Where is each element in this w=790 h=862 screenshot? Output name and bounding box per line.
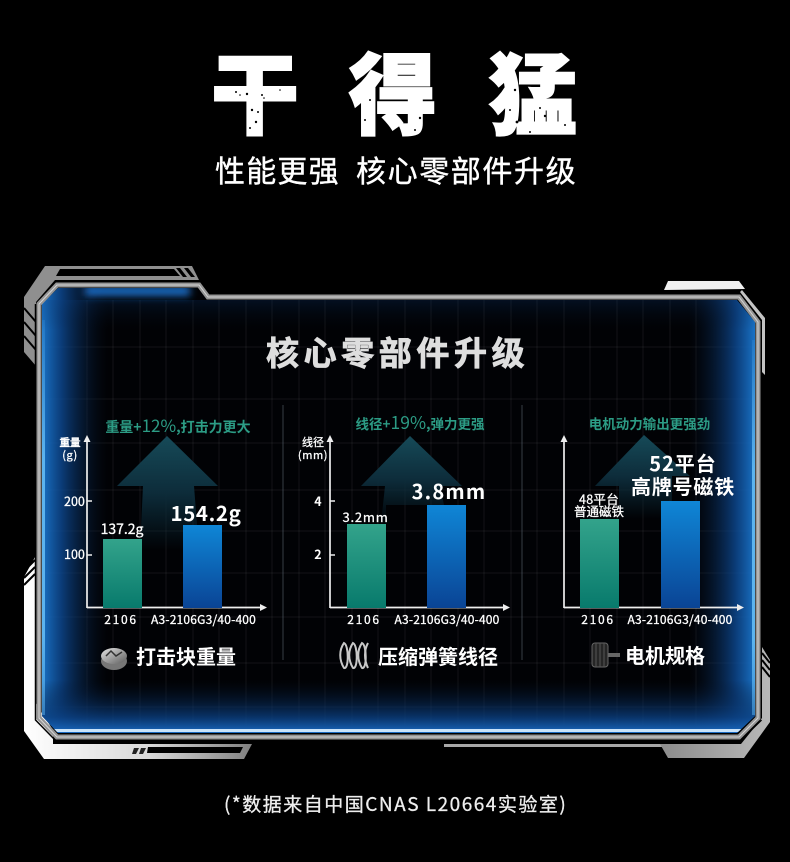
- bar: 2106: [574, 489, 624, 628]
- axis labels: 100: [64, 544, 85, 563]
- axis labels: 2: [314, 544, 322, 563]
- axes: [560, 435, 744, 611]
- bottom-left silver piece: [24, 557, 252, 759]
- blue glows: [42, 286, 755, 733]
- title: 干得猛: 得: [349, 26, 437, 153]
- footnote: (*数据来自中国CNAS L20664实验室): [224, 790, 567, 817]
- axis labels: 重量: [60, 435, 81, 450]
- axis labels: (g): [62, 447, 78, 463]
- bar: 2106: 普通磁铁: [574, 501, 624, 520]
- bar: 2106: 2106: [104, 611, 138, 628]
- bar: 2106: 2106: [581, 611, 615, 628]
- bar: A3-2106G3: A3-2106G3/40-400: [394, 611, 500, 628]
- chart: wire diameter: [298, 410, 510, 670]
- bar: A3-2106G3: [627, 448, 735, 628]
- axis labels: [298, 434, 328, 563]
- title: 干得猛: 猛: [489, 26, 577, 153]
- axis labels: [60, 435, 85, 563]
- bar: A3-2106G3: [151, 497, 256, 628]
- chart: weight: [60, 412, 267, 670]
- background arrow: [117, 436, 218, 550]
- axes: [326, 435, 510, 611]
- panel heading: 核心零部件升级: [266, 327, 529, 375]
- caption: 线径+19%,弹力更强: [356, 410, 485, 435]
- bar: 2106: [342, 507, 389, 628]
- bar: 2106: 3.2mm: [342, 507, 389, 526]
- icon: hammer block: [101, 648, 127, 670]
- bar: A3-2106G3: A3-2106G3/40-400: [627, 611, 733, 628]
- chrome frame band: [36, 285, 762, 741]
- panel frame and glow: [24, 266, 770, 759]
- background arrow: [361, 436, 462, 524]
- bar: 2106: 2106: [347, 611, 381, 628]
- caption: 电机动力输出更强劲: [589, 413, 710, 433]
- background grid: [78, 300, 719, 708]
- bar: A3-2106G3: A3-2106G3/40-400: [151, 611, 256, 628]
- title: 干得猛: 干: [211, 26, 299, 153]
- chart: motor: [560, 413, 744, 669]
- background arrow: [595, 435, 690, 519]
- bar: A3-2106G3: [394, 476, 500, 628]
- subtitle: 性能更强: [215, 147, 340, 191]
- top-right silver tab: [664, 281, 765, 375]
- bottom-right silver piece: [444, 647, 770, 758]
- icon: motor: [592, 643, 620, 667]
- axes: [84, 435, 267, 611]
- bottom-left notch: [24, 560, 243, 754]
- label: 电机规格: [625, 640, 705, 669]
- bar: A3-2106G3: 154.2g: [171, 497, 241, 527]
- icon: spring: [340, 643, 368, 668]
- axis labels: 线径: [302, 434, 324, 450]
- bar: 2106: 137.2g: [101, 519, 144, 539]
- bar: A3-2106G3: 高牌号磁铁: [631, 471, 735, 500]
- bar: A3-2106G3: 3.8mm: [412, 476, 486, 505]
- axis labels: 200: [64, 491, 85, 510]
- subtitle part two: 核心零部件升级: [356, 147, 577, 191]
- top-left silver tab: [24, 266, 199, 366]
- axis labels: (mm): [298, 447, 328, 463]
- bar: 2106: 48平台: [579, 489, 619, 508]
- panel background: [42, 288, 755, 733]
- title: 干得猛: [211, 26, 577, 153]
- label: 压缩弹簧线径: [378, 641, 498, 670]
- column dividers: [283, 405, 522, 660]
- caption: 重量+12%,打击力更大: [105, 412, 251, 437]
- label: 打击块重量: [136, 641, 236, 670]
- bar: A3-2106G3: 52平台: [649, 448, 717, 477]
- bar: 2106: [101, 519, 144, 628]
- axis labels: 4: [314, 491, 322, 510]
